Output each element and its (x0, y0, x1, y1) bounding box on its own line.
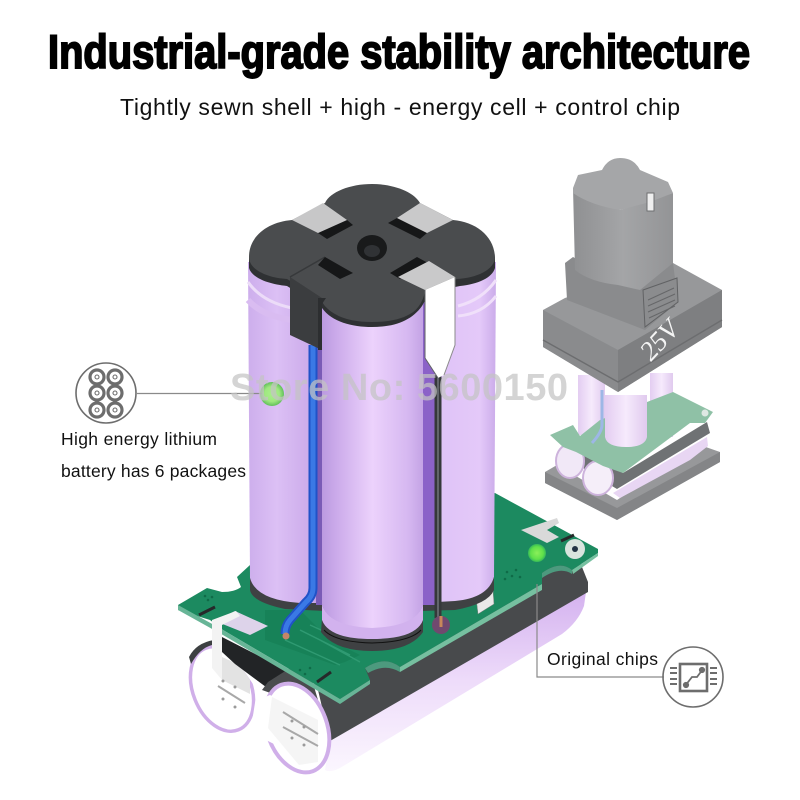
leader line (137, 392, 262, 394)
gap between cells (316, 345, 324, 605)
small reference battery pack (543, 158, 722, 520)
leader line (537, 584, 664, 677)
subtitle: Tightly sewn shell + high - energy cell + control chip (120, 94, 680, 120)
mini lower cell and holder (556, 422, 710, 498)
mini housing collar (565, 257, 678, 330)
right cell end (253, 675, 341, 781)
label text: High energy lithium (61, 429, 217, 449)
main battery assembly (178, 184, 598, 781)
cell rim highlights (248, 282, 292, 308)
silver tabs (292, 203, 347, 233)
centre hole (357, 235, 387, 261)
left cell end (179, 637, 265, 741)
mini grey housing (543, 158, 722, 392)
mini housing base (543, 263, 722, 392)
PCB board (178, 493, 598, 704)
black top cap (249, 184, 495, 350)
callout: lithium battery: battery has 6 packages (61, 461, 246, 481)
mini cells (578, 373, 673, 437)
blue wire (285, 345, 313, 634)
callout: lithium battery (61, 363, 262, 481)
cap clip (290, 277, 322, 350)
PCB tabs (215, 611, 268, 635)
icon: six cells (76, 363, 136, 423)
cap slots (318, 257, 353, 279)
mini base plate (545, 445, 720, 520)
green indicator cell (260, 382, 284, 406)
callout: original chips (537, 584, 723, 707)
PCB solder ring (565, 539, 585, 559)
watermark: Store No: 5600150 (230, 367, 568, 409)
mini 25V label: 25V (633, 311, 687, 366)
front cell (321, 300, 423, 651)
back right cell (415, 262, 496, 604)
left end cells (179, 637, 341, 781)
lower horizontal cell (325, 592, 586, 771)
green indicator chip (528, 544, 546, 562)
black wire (434, 375, 442, 618)
nickel strip (425, 277, 455, 378)
mini PCB (550, 392, 713, 473)
back left cell (248, 262, 330, 604)
label text: Original chips (547, 649, 658, 669)
holder dark side (300, 560, 588, 741)
icon: chip (663, 647, 723, 707)
mini housing upper body (573, 188, 673, 290)
